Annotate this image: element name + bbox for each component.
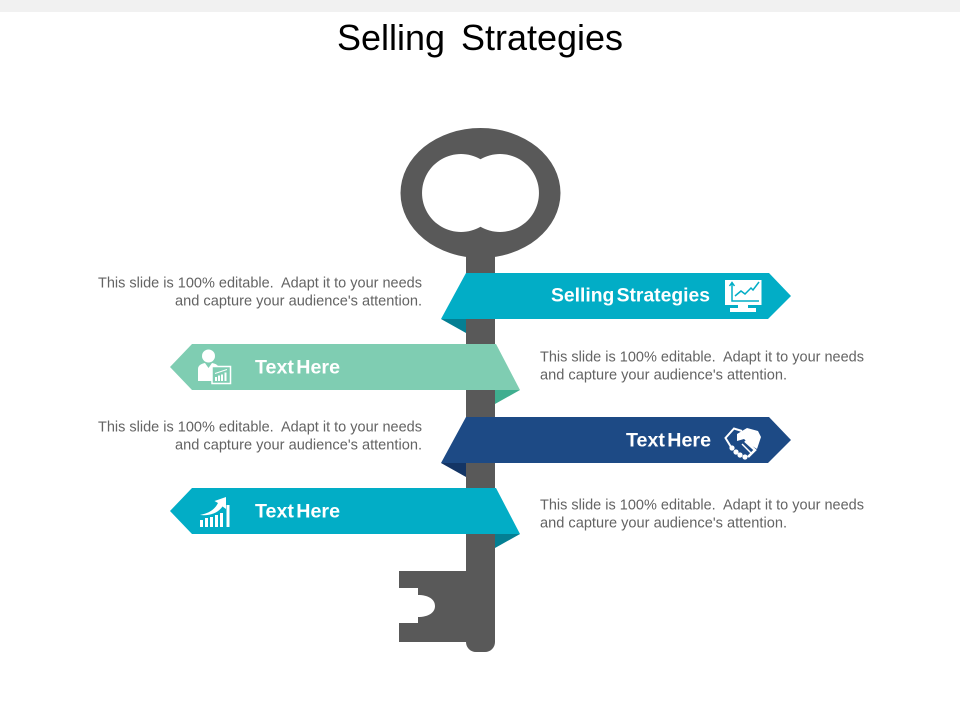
text block 3 <box>98 420 422 454</box>
text block 1: and capture your audience's attention. <box>175 294 422 310</box>
banner 2: text here <box>170 344 520 404</box>
banner 4: text here <box>170 488 520 548</box>
text block 2: This slide is 100% editable. Adapt it to your needs <box>540 350 864 366</box>
banner 3: text here <box>441 417 791 477</box>
text block 1: This slide is 100% editable. Adapt it to your needs <box>98 276 422 292</box>
banner 4 label: Text Here <box>255 502 340 522</box>
title: Selling Strategies <box>337 17 623 58</box>
banner 1: selling strategies <box>441 273 791 333</box>
banner 1 label: Selling Strategies <box>551 286 710 306</box>
text block 4: and capture your audience's attention. <box>540 516 787 532</box>
text block 2: and capture your audience's attention. <box>540 368 787 384</box>
icon: handshake <box>726 428 761 460</box>
text block 1 <box>98 276 422 310</box>
text block 3: and capture your audience's attention. <box>175 438 422 454</box>
banner 3 label: Text Here <box>626 430 711 452</box>
text block 4: This slide is 100% editable. Adapt it to your needs <box>540 498 864 514</box>
icon: monitor with line chart <box>725 280 762 312</box>
banner 2 label: Text Here <box>255 358 340 378</box>
text block 4 <box>540 498 864 532</box>
text block 2 <box>540 350 864 384</box>
icon: growth bars with arrow <box>200 497 230 527</box>
key <box>399 128 560 652</box>
icon: person with chart board <box>198 350 230 384</box>
text block 3: This slide is 100% editable. Adapt it to your needs <box>98 420 422 436</box>
